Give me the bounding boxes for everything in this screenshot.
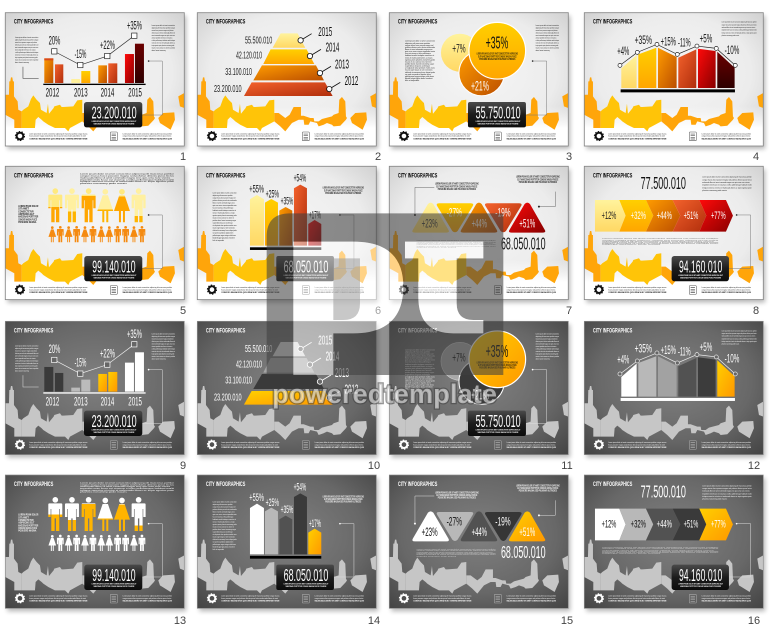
percent labels: -15%: [75, 47, 86, 61]
heading: CITY INFOGRAPHICS: [398, 328, 437, 334]
value labels: [214, 35, 272, 95]
percent labels: +5%: [700, 340, 712, 354]
percent labels: +51%: [519, 216, 535, 230]
year labels: [46, 86, 142, 100]
footer: [15, 132, 172, 141]
circle chart: +21%: [471, 78, 489, 94]
heading: CITY INFOGRAPHICS: [593, 173, 632, 179]
value labels: 33.100.010: [225, 67, 252, 78]
slide numbers: 11: [561, 460, 573, 472]
circle chart: +35%: [486, 341, 508, 361]
year labels: 2015: [128, 394, 142, 408]
percent labels: +12%: [602, 210, 616, 222]
panel: slide 15 dark triangles: [389, 475, 570, 611]
text block left: [405, 40, 436, 82]
footer: [15, 285, 172, 294]
panel: slide 16 dark chevrons: [584, 475, 765, 611]
panel: slide 14 dark arrow bars: +17%: [309, 518, 321, 530]
panel: slide 14 dark arrow bars: [197, 475, 378, 611]
pointers: [298, 342, 340, 400]
connector: [334, 214, 354, 268]
panel: slide 8 chevrons: [584, 166, 765, 303]
callout box: 94.160.010: [679, 256, 722, 276]
percent labels: +35%: [281, 195, 294, 207]
footer: [399, 440, 556, 449]
watermark logo: [267, 213, 503, 375]
percent labels: +22%: [100, 347, 115, 361]
big number: 77.500.010: [641, 173, 686, 193]
text block left: [213, 500, 237, 551]
panel: slide 11 dark circles: [389, 321, 570, 458]
year labels: 2015: [318, 334, 332, 348]
panel: slide 13 dark people: [5, 475, 186, 611]
slide numbers: [174, 151, 760, 627]
year labels: 2015: [128, 86, 142, 100]
column chart: [621, 48, 735, 92]
heading: CITY INFOGRAPHICS: [14, 20, 53, 26]
text block right: [536, 24, 559, 52]
text block left: [15, 36, 39, 64]
triangle chart: [412, 203, 545, 233]
text block top: [435, 183, 479, 191]
year labels: 2014: [326, 41, 339, 55]
small people: [48, 226, 145, 242]
panel: slide 1 bar and line chart: [5, 13, 186, 149]
percent labels: +54%: [294, 173, 307, 185]
circle chart: +21%: [471, 386, 489, 402]
triangle chart: [412, 511, 545, 541]
callout box: 94.160.010: [679, 565, 722, 585]
percent labels: +51%: [519, 525, 535, 539]
connector: [729, 523, 751, 577]
percent labels: [249, 481, 321, 530]
circle chart: +35%: [486, 32, 508, 52]
chevron chart: [595, 509, 733, 540]
slide numbers: 10: [368, 460, 380, 472]
connector: [142, 523, 162, 577]
big number: 68.050.010: [501, 542, 546, 562]
panel: slide 9 dark bar and line chart: [5, 321, 186, 458]
callout box: 68.050.010: [284, 256, 328, 276]
year labels: 2015: [318, 25, 332, 39]
percent labels: +44%: [472, 216, 487, 230]
percent labels: +51%: [684, 210, 698, 222]
percent labels: -19%: [495, 514, 511, 528]
watermark wordmark: poweredtemplate: [272, 379, 497, 409]
text block: [702, 175, 752, 192]
slide numbers: 2: [375, 151, 381, 163]
text block middle: [417, 240, 496, 248]
value labels: 55.500.010: [245, 344, 272, 355]
pointers: [298, 34, 340, 92]
percent labels: [617, 340, 739, 367]
callout box: 55.750.010: [476, 411, 521, 431]
chevron chart: [595, 200, 733, 232]
connector: [526, 60, 547, 115]
percent labels: +51%: [684, 519, 698, 531]
year labels: [318, 25, 358, 88]
percent labels: -15%: [75, 356, 86, 370]
callout box: [84, 256, 142, 281]
footer: [15, 440, 172, 449]
value labels: 33.100.010: [225, 376, 252, 387]
callout box: [84, 102, 142, 127]
text block top: [435, 491, 479, 500]
percent labels: +22%: [100, 38, 115, 52]
callout box: [84, 565, 142, 590]
footer: [594, 594, 751, 603]
percent labels: +15%: [661, 34, 676, 48]
circle chart: [441, 22, 526, 96]
slide numbers: 8: [753, 305, 759, 317]
value labels: [214, 344, 272, 404]
callout box: 99.140.010: [92, 565, 136, 585]
panel: slide 9 dark bar and line chart: +35%: [127, 327, 142, 341]
heading: CITY INFOGRAPHICS: [14, 328, 53, 334]
text block top right: [516, 176, 560, 184]
text block left: [15, 345, 39, 373]
percent labels: [422, 514, 535, 539]
heading: CITY INFOGRAPHICS: [14, 173, 53, 179]
footer: [207, 285, 364, 294]
value labels: 23.200.010: [214, 84, 242, 95]
year labels: 2013: [335, 57, 349, 71]
panel: slide 7 triangles: [389, 166, 570, 303]
text block middle: [417, 549, 496, 557]
callout box: [468, 102, 526, 127]
footer: [594, 285, 751, 294]
year labels: [318, 334, 358, 397]
text block top right: [516, 484, 560, 493]
percent labels: +4%: [617, 44, 629, 58]
year labels: 2014: [326, 349, 339, 363]
percent labels: [249, 173, 321, 221]
slide numbers: 4: [753, 151, 759, 163]
percent labels: +25%: [266, 188, 279, 200]
heading: CITY INFOGRAPHICS: [206, 20, 245, 26]
percent labels: +55%: [249, 492, 264, 504]
percent labels: [602, 210, 726, 222]
connector: [142, 369, 162, 424]
connectors: [414, 496, 555, 525]
text block: [702, 484, 752, 500]
callout box: 68.050.010: [284, 565, 328, 585]
circle chart: [441, 331, 526, 404]
percent labels: 20%: [49, 33, 60, 47]
text block: [722, 21, 757, 37]
text block top: [80, 482, 174, 493]
callout box: [84, 411, 142, 436]
footer: [207, 132, 364, 141]
percent labels: +35%: [281, 504, 294, 516]
footer: [207, 440, 364, 449]
callout box: [468, 411, 526, 436]
percent labels: +35%: [635, 33, 652, 47]
heading: CITY INFOGRAPHICS: [593, 328, 632, 334]
percent labels: [422, 206, 535, 230]
text block top: [80, 173, 174, 184]
footer: [207, 594, 364, 603]
percent labels: +77%: [711, 210, 726, 222]
bar chart: [43, 352, 146, 394]
arrow: [23, 67, 39, 78]
big number: 68.050.010: [501, 233, 546, 253]
percent labels: +55%: [249, 183, 264, 195]
callout box: [672, 565, 729, 590]
panel: slide 12 dark area columns: [584, 321, 765, 458]
percent labels: +23%: [422, 216, 438, 230]
circle chart: +7%: [452, 42, 466, 56]
circle chart: +7%: [452, 350, 466, 364]
arrow bar chart: [250, 185, 321, 250]
callout box: 23.200.010: [92, 102, 137, 122]
connector: [142, 60, 162, 115]
percent labels: -27%: [447, 206, 462, 220]
callout box: [276, 565, 334, 590]
slide numbers: 12: [748, 460, 760, 472]
callout box: 55.750.010: [476, 102, 521, 122]
percent labels: [49, 18, 142, 61]
slide numbers: 15: [561, 615, 573, 627]
heading: CITY INFOGRAPHICS: [14, 482, 53, 488]
callout box: 23.200.010: [92, 411, 137, 431]
heading: CITY INFOGRAPHICS: [593, 482, 632, 488]
big number: 77.500.010: [641, 482, 686, 502]
percent labels: +32%: [631, 519, 646, 531]
year labels: 2013: [74, 86, 88, 100]
text block left: [18, 515, 39, 533]
panel: slide 10 dark pyramid: [197, 321, 378, 458]
text block middle: [602, 238, 718, 246]
year labels: [46, 394, 142, 408]
text block left: [405, 349, 436, 390]
panel: slide 2 pyramid: 2012: [345, 74, 358, 88]
value labels: 42.120.010: [236, 359, 262, 370]
percent labels: -10%: [725, 352, 739, 366]
value labels: 42.120.010: [236, 51, 262, 62]
bar chart: [43, 44, 146, 85]
line series: [52, 33, 137, 68]
callout box: [276, 256, 334, 281]
slide numbers: 16: [748, 615, 760, 627]
slide numbers: 14: [368, 615, 380, 627]
panel: slide 5 people: [5, 166, 186, 303]
slide numbers: 6: [375, 305, 381, 317]
percent labels: -11%: [678, 36, 691, 50]
text block right: [536, 333, 559, 361]
footer: [594, 132, 751, 141]
percent labels: -19%: [495, 206, 511, 220]
text block left: [18, 206, 39, 224]
text block right: [152, 333, 175, 361]
year labels: 2014: [101, 394, 114, 408]
text block right: [323, 187, 364, 195]
footer: [399, 132, 556, 141]
year labels: 2013: [335, 366, 349, 380]
slide numbers: 7: [566, 305, 572, 317]
heading: CITY INFOGRAPHICS: [206, 173, 245, 179]
heading: CITY INFOGRAPHICS: [398, 20, 437, 26]
percent labels: +4%: [617, 353, 629, 367]
value labels: 55.500.010: [245, 35, 272, 46]
footer: [594, 440, 751, 449]
text block: [722, 329, 757, 346]
panel: slide 6 arrow bars: +17%: [309, 209, 321, 221]
connector: [142, 214, 162, 268]
percent labels: +25%: [266, 497, 279, 509]
arrow bar chart: [250, 493, 321, 559]
line series: [52, 342, 137, 376]
panel: slide 2 pyramid: [197, 13, 378, 149]
pyramid: [244, 342, 333, 405]
callout box: [672, 256, 729, 281]
text block right: [152, 24, 175, 52]
year labels: 2012: [46, 86, 59, 100]
percent labels: +77%: [711, 519, 726, 531]
panel: slide 3 circles: [389, 13, 570, 149]
heading: CITY INFOGRAPHICS: [206, 482, 245, 488]
pyramid: [244, 33, 333, 96]
percent labels: +23%: [422, 525, 438, 539]
percent labels: -27%: [447, 514, 462, 528]
large people: [48, 497, 146, 531]
slide numbers: 5: [180, 305, 186, 317]
percent labels: 20%: [49, 342, 60, 356]
text block left: [213, 192, 237, 242]
connectors: [414, 187, 555, 216]
percent labels: [49, 327, 142, 370]
percent labels: +12%: [602, 519, 616, 531]
percent labels: -11%: [678, 344, 691, 358]
year labels: 2012: [46, 394, 59, 408]
panel: slide 6 arrow bars: [197, 166, 378, 303]
connector: [334, 523, 354, 577]
connector: [526, 369, 547, 424]
percent labels: [617, 31, 739, 58]
year labels: 2014: [101, 86, 114, 100]
percent labels: +44%: [657, 519, 672, 531]
panel: slide 1 bar and line chart: +35%: [127, 18, 142, 32]
slide numbers: 13: [174, 615, 186, 627]
text block middle: [602, 547, 718, 554]
panel: slide 4 area columns: [584, 13, 765, 149]
heading: CITY INFOGRAPHICS: [206, 328, 245, 334]
callout box: 99.140.010: [92, 256, 136, 276]
heading: CITY INFOGRAPHICS: [593, 20, 632, 26]
year labels: 2013: [74, 394, 88, 408]
footer: [15, 594, 172, 603]
percent labels: +44%: [472, 525, 487, 539]
panel: slide 10 dark pyramid: 2012: [345, 383, 358, 397]
percent labels: -10%: [725, 43, 739, 57]
line series: [618, 42, 737, 67]
connector: [729, 214, 751, 268]
text block right: [323, 495, 364, 504]
slide numbers: 1: [180, 151, 186, 163]
percent labels: +5%: [700, 31, 712, 45]
percent labels: +44%: [657, 210, 672, 222]
line series: [618, 351, 737, 376]
footer: [399, 594, 556, 603]
heading: CITY INFOGRAPHICS: [398, 173, 437, 179]
heading: CITY INFOGRAPHICS: [398, 482, 437, 488]
percent labels: +54%: [294, 481, 307, 493]
small people: [48, 535, 145, 551]
value labels: 23.200.010: [214, 393, 242, 404]
percent labels: [602, 519, 726, 531]
percent labels: +35%: [635, 342, 652, 356]
slide numbers: 9: [180, 460, 186, 472]
footer: [399, 285, 556, 294]
slide numbers: 3: [566, 151, 572, 163]
percent labels: +32%: [631, 210, 646, 222]
arrow: [23, 375, 39, 387]
column chart: [621, 356, 735, 401]
percent labels: +15%: [661, 343, 676, 357]
large people: [48, 188, 146, 222]
